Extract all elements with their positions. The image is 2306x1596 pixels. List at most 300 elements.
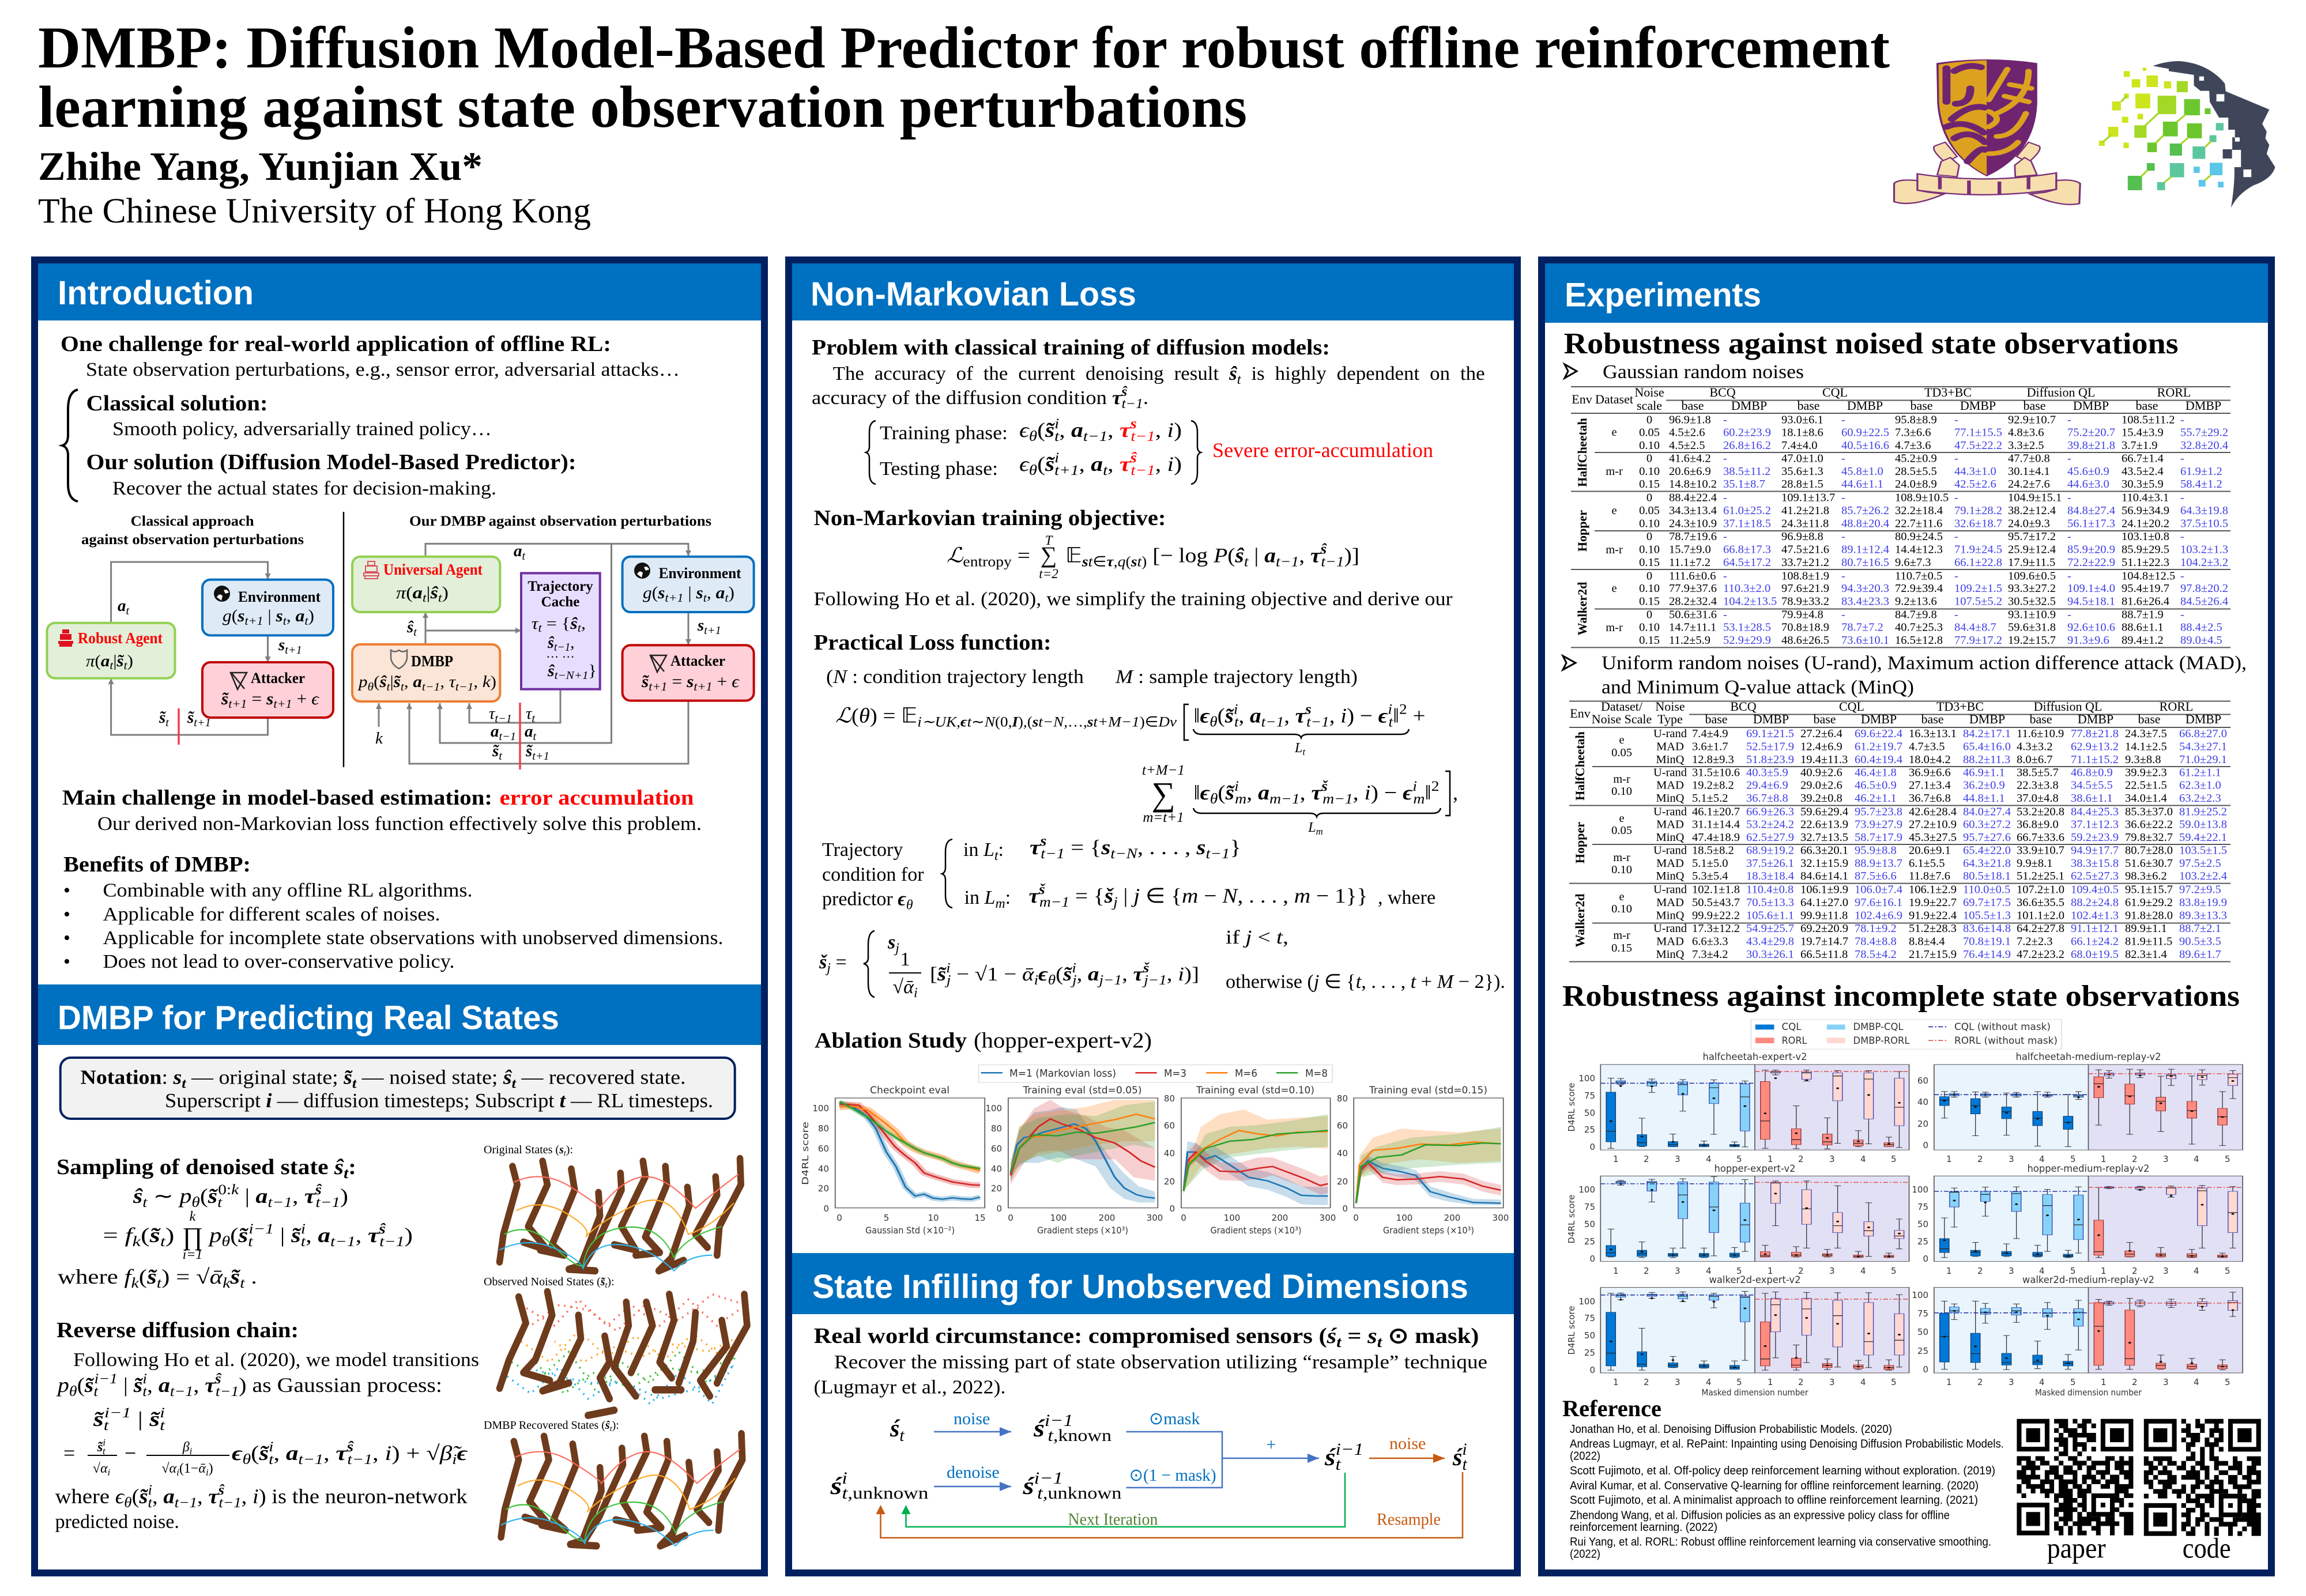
- text block: problem: [812, 335, 1485, 412]
- x tick labels: 4: [2039, 1154, 2045, 1164]
- text and formula: reverse diffusion: predicted noise.: [55, 1511, 179, 1533]
- table body: 18.3±18.4: [1746, 870, 1794, 882]
- table body: 78.5±4.2: [1855, 948, 1897, 961]
- table body: 32.1±15.9: [1800, 857, 1848, 870]
- table body: 7.4±4.0: [1781, 439, 1818, 452]
- reference list: Rui Yang, et al. RORL: Robust offline reinforcement learning via conservative smoothing.: [1570, 1536, 1991, 1549]
- x tick labels: 5: [1736, 1377, 1742, 1387]
- subplot titles: halfcheetah-medium-replay-v2: [2015, 1051, 2161, 1063]
- table body: 44.6±1.1: [1841, 478, 1883, 491]
- table body: 18.0±4.2: [1909, 753, 1951, 766]
- table body: 11.6±10.9: [2017, 727, 2064, 740]
- table body: 47.5±22.2: [1954, 439, 2002, 452]
- box: DMBP: [352, 644, 500, 701]
- logo: CUHK crest: [1894, 59, 2080, 205]
- x tick labels: 3: [1675, 1266, 1680, 1276]
- table body: 9.9±8.1: [2017, 857, 2053, 870]
- table body: 64.2±27.8: [2017, 922, 2064, 935]
- table body: 0: [1646, 530, 1652, 543]
- heading: ablation study: Ablation Study: [815, 1028, 967, 1052]
- y tick labels: 25: [1584, 1125, 1595, 1135]
- chart titles: Training eval (std=0.10): [1196, 1085, 1314, 1096]
- table body: 62.3±1.0: [2179, 779, 2221, 792]
- formula: s-check definition: šj =: [819, 952, 847, 976]
- table body: -: [1841, 452, 1845, 465]
- table body: 3.3±2.5: [2008, 439, 2044, 452]
- table body: 0.15: [1639, 634, 1660, 647]
- chart ticks: 300: [1320, 1213, 1336, 1223]
- x tick labels: [1613, 1154, 2230, 1387]
- chart ticks: 80: [1164, 1093, 1175, 1104]
- x tick labels: 4: [1860, 1154, 1866, 1164]
- table body: U-rand: [1653, 806, 1687, 818]
- nodes: śit: [1452, 1440, 1468, 1474]
- icon: robot: [364, 561, 379, 579]
- heading: against observation perturbations: [81, 532, 304, 548]
- diagram: DMBP against perturbations: [352, 514, 754, 769]
- subplot: hopper-medium-replay: [1934, 1176, 2243, 1262]
- table body: -: [2180, 491, 2184, 504]
- x tick labels: 4: [1860, 1266, 1866, 1276]
- table body: 36.7±8.8: [1746, 792, 1788, 805]
- text: trajectory condition: , where: [1378, 887, 1435, 908]
- table body: 65.4±16.0: [1963, 741, 2011, 753]
- table body: 88.9±13.7: [1855, 857, 1902, 870]
- subplot titles: halfcheetah-expert-v2: [1703, 1051, 1807, 1063]
- diagram: resampling flow: [830, 1409, 1468, 1538]
- table body: 83.4±23.3: [1841, 595, 1889, 608]
- table body: 95.7±23.8: [1855, 806, 1902, 818]
- table body: 103.5±1.5: [2179, 844, 2227, 857]
- table body: 80.7±28.0: [2125, 844, 2173, 857]
- table header: [1572, 385, 2221, 413]
- x tick labels: 4: [2039, 1266, 2045, 1276]
- table body: 34.0±1.4: [2125, 792, 2167, 805]
- chart titles: Checkpoint eval: [870, 1085, 949, 1096]
- table body: -: [2067, 414, 2071, 427]
- y tick labels: 100: [1912, 1184, 1928, 1195]
- caption: original states: Original States (st):: [484, 1144, 573, 1158]
- text block: circumstance: Real world circumstance: compromised sensors ( śt = st ⊙ mask): [814, 1324, 1479, 1350]
- chart ticks: 0: [1008, 1213, 1013, 1223]
- table body: 30.3±5.9: [2122, 478, 2164, 491]
- table body: 35.1±8.7: [1723, 478, 1765, 491]
- x tick labels: 1: [2101, 1377, 2107, 1387]
- table body: 0.10: [1639, 439, 1660, 452]
- table body: 91.3±9.6: [2067, 634, 2109, 647]
- flow labels: τt: [526, 704, 536, 725]
- table body: 40.3±5.9: [1746, 766, 1788, 779]
- chart ticks: 15: [974, 1213, 986, 1223]
- table body: 24.3±10.9: [1669, 517, 1717, 530]
- flow labels: k: [375, 729, 383, 748]
- table body: 59.2±23.9: [2071, 831, 2119, 844]
- table body: 53.2±24.2: [1746, 818, 1794, 831]
- y tick labels: 20: [1917, 1119, 1928, 1129]
- table body: 84.5±26.4: [2180, 595, 2228, 608]
- table header: DMBP: [1861, 712, 1897, 726]
- table body: -: [1954, 414, 1958, 427]
- authors: Zhihe Yang, Yunjian Xu*: [38, 145, 483, 189]
- table header: BCQ: [1730, 699, 1757, 714]
- table body: 22.3±3.8: [2017, 779, 2059, 792]
- table body: -: [2067, 491, 2071, 504]
- caption: observed noised states: Observed Noised States (s̃t):: [484, 1276, 615, 1290]
- table rules: [1569, 701, 2230, 961]
- table body: 69.7±17.5: [1963, 896, 2011, 909]
- subplot titles: hopper-expert-v2: [1715, 1163, 1795, 1175]
- table body: 88.4±2.5: [2180, 621, 2222, 634]
- table body: 3.6±1.7: [1692, 741, 1728, 753]
- table body: 50.5±43.7: [1692, 896, 1740, 909]
- table body: 76.4±14.9: [1963, 948, 2011, 961]
- x tick labels: 4: [2194, 1377, 2199, 1387]
- table row labels: m-r: [1606, 544, 1623, 556]
- table body: -: [1723, 569, 1727, 582]
- box: robust agent: Robust Agent: [78, 629, 163, 647]
- formula: sampling: = fk(s̃t): [103, 1224, 174, 1250]
- table body: 0.10: [1639, 517, 1660, 530]
- table body: MAD: [1656, 818, 1684, 831]
- table body: -: [2180, 530, 2184, 543]
- chart ticks: 40: [818, 1164, 829, 1174]
- table body: U-rand: [1653, 766, 1687, 779]
- box: robust agent: [47, 623, 175, 678]
- table body: 54.9±25.7: [1746, 922, 1794, 935]
- subplot: hopper-expert: [1600, 1176, 1909, 1262]
- table body: 103.2±2.4: [2179, 870, 2227, 882]
- table body: 0.10: [1639, 621, 1660, 634]
- formula: s-check definition: [s̃ij − √1 − ᾱiϵθ(s̃ij, aj−1, τšj−1, i)]: [930, 961, 1199, 988]
- chart ticks: 0: [1169, 1203, 1175, 1214]
- table body: MAD: [1656, 935, 1684, 948]
- table body: 110.0±0.5: [1963, 883, 2010, 896]
- reference list: (2022): [1570, 1548, 1600, 1561]
- y tick labels: 100: [1578, 1296, 1595, 1307]
- table header: base: [2029, 712, 2052, 726]
- x tick labels: 1: [1946, 1377, 1952, 1387]
- table body: 62.5±27.3: [2071, 870, 2119, 882]
- x tick labels: 3: [1829, 1377, 1835, 1387]
- table body: 53.1±28.5: [1723, 621, 1771, 634]
- formula: sampling: i=1: [183, 1247, 202, 1262]
- formula: s-check definition: otherwise (j ∈ {t, . . . , t + M − 2}).: [1226, 971, 1505, 993]
- text block: main challenge: Main challenge in model-based estimation:: [62, 786, 492, 810]
- heading: reference: Reference: [1562, 1395, 1661, 1421]
- table body: 81.9±25.2: [2179, 806, 2227, 818]
- x tick labels: 3: [2009, 1377, 2014, 1387]
- table body: 66.7±1.4: [2122, 452, 2164, 465]
- x tick labels: 3: [1829, 1266, 1835, 1276]
- table body: -: [2067, 569, 2071, 582]
- walker sequences: [500, 1159, 747, 1546]
- table body: 94.5±18.1: [2067, 595, 2115, 608]
- table body: 81.6±26.4: [2122, 595, 2169, 608]
- table body: 36.6±22.2: [2125, 818, 2173, 831]
- table body: 47.5±21.6: [1781, 543, 1829, 556]
- table header: DMBP: [2078, 712, 2113, 726]
- table body: MAD: [1656, 857, 1684, 870]
- text: trajectory condition: in Lt:: [963, 839, 1004, 863]
- table body: -: [1841, 569, 1845, 582]
- table row labels: 0.10: [1611, 785, 1632, 798]
- subplot: halfcheetah-medium-replay: [1934, 1065, 2243, 1150]
- table body: 91.9±22.4: [1909, 909, 1957, 922]
- subheading: attack types: [1563, 652, 2247, 698]
- formula: practical loss: t+M−1: [1142, 763, 1185, 778]
- table body: 60.4±19.4: [1855, 753, 1902, 766]
- table row labels: m-r: [1613, 929, 1630, 942]
- table body: 92.6±10.6: [2067, 621, 2115, 634]
- table body: 12.8±9.3: [1692, 753, 1734, 766]
- table body: -: [1841, 608, 1845, 621]
- table row labels: e: [1611, 426, 1617, 439]
- formula: s-check definition: √ᾱi: [892, 976, 918, 1001]
- table header: base: [1921, 712, 1944, 726]
- y tick labels: 0: [1923, 1254, 1928, 1264]
- table body: 89.0±4.5: [2180, 634, 2222, 647]
- arrows: [881, 1432, 1463, 1538]
- table body: 85.9±20.9: [2067, 543, 2115, 556]
- formula: training vs testing: Testing phase:: [880, 458, 998, 480]
- table body: 88.2±11.3: [1963, 753, 2010, 766]
- flow labels: [947, 1409, 1441, 1529]
- table body: 7.4±4.9: [1692, 727, 1728, 740]
- table body: 97.2±9.5: [2179, 883, 2221, 896]
- chart axis labels: Gaussian Std (×10⁻²): [865, 1225, 955, 1236]
- y tick labels: 0: [1589, 1254, 1595, 1264]
- table body: 7.2±2.3: [2017, 935, 2053, 948]
- section header: Non-Markovian Loss: Non-Markovian Loss: [811, 276, 1136, 313]
- table body: -: [1841, 530, 1845, 543]
- chart ticks: 60: [1337, 1120, 1348, 1131]
- chart legend labels: M=3: [1164, 1067, 1186, 1080]
- table header: DMBP: [1960, 398, 1996, 413]
- text block: benefits: •: [63, 880, 70, 901]
- table body: 109.1±13.7: [1781, 491, 1835, 504]
- table body: 78.7±7.2: [1841, 621, 1883, 634]
- icon: globe: [214, 586, 230, 602]
- chart ticks: 40: [991, 1164, 1002, 1174]
- x tick labels: 2: [2132, 1377, 2138, 1387]
- chart ticks: 60: [1164, 1120, 1175, 1131]
- x tick labels: 1: [1613, 1266, 1619, 1276]
- table body: 46.5±0.9: [1855, 779, 1897, 792]
- formula: s-check definition: if j < t,: [1226, 927, 1288, 948]
- table body: 18.5±8.2: [1692, 844, 1734, 857]
- table body: 95.9±8.8: [1855, 844, 1897, 857]
- table body: 63.2±2.3: [2179, 792, 2221, 805]
- table body: -: [2180, 452, 2184, 465]
- table body: 102.4±6.9: [1855, 909, 1902, 922]
- table body: 95.7±27.6: [1963, 831, 2011, 844]
- table body: 21.7±15.9: [1909, 948, 1957, 961]
- y tick labels: 25: [1917, 1236, 1928, 1247]
- y tick labels: 0: [1589, 1142, 1595, 1152]
- table body: 90.5±3.5: [2179, 935, 2221, 948]
- chart ticks: 60: [818, 1144, 829, 1154]
- y tick labels: 75: [1917, 1308, 1928, 1319]
- x tick labels: 1: [2101, 1154, 2107, 1164]
- table header: scale: [1637, 398, 1662, 413]
- text block: benefits: •: [63, 951, 70, 972]
- table body: 5.3±5.4: [1692, 870, 1728, 882]
- table body: 26.8±16.2: [1723, 439, 1771, 452]
- y tick labels: 40: [1917, 1097, 1928, 1107]
- x tick labels: 5: [2070, 1154, 2076, 1164]
- table body: 85.9±29.5: [2122, 543, 2169, 556]
- text block: benefits: Benefits of DMBP:: [63, 852, 251, 877]
- table body: 64.5±17.2: [1723, 556, 1771, 569]
- table body: 61.2±19.7: [1855, 741, 1902, 753]
- text and formula: reverse diffusion: s̃it: [97, 1437, 105, 1457]
- table body: 47.0±1.0: [1781, 452, 1823, 465]
- table body: MinQ: [1656, 831, 1685, 844]
- table body: 68.9±19.2: [1746, 844, 1794, 857]
- formula: entropy loss: ∑: [1041, 542, 1057, 568]
- table body: 104.2±3.2: [2180, 556, 2228, 569]
- table body: MinQ: [1656, 909, 1685, 922]
- nodes: śit,unknown: [830, 1469, 929, 1503]
- axis labels: Masked dimension number: [2035, 1387, 2142, 1398]
- table body: 109.1±4.0: [2067, 582, 2115, 595]
- chart ticks: 0: [1353, 1213, 1359, 1223]
- table body: 0.10: [1639, 465, 1660, 478]
- box: trajectory cache: … …: [546, 646, 575, 661]
- table body: 6.6±3.3: [1692, 935, 1728, 948]
- heading: incomplete observations: Robustness against incomplete state observations: [1562, 980, 2240, 1013]
- table body: 44.3±1.0: [1954, 465, 1996, 478]
- heading: ablation study: [815, 1028, 1152, 1052]
- table body: 60.9±22.5: [1841, 426, 1889, 439]
- table body: 31.1±14.4: [1692, 818, 1740, 831]
- chart axis labels: Gradient steps (×10³): [1037, 1225, 1128, 1236]
- table header: Noise Scale: [1592, 712, 1652, 726]
- table body: 37.1±12.3: [2071, 818, 2119, 831]
- table body: 111.6±0.6: [1669, 569, 1716, 582]
- text and formula: reverse diffusion: ϵθ(s̃it, at−1, τŝt−1, i) + √ β̃iϵ: [232, 1439, 468, 1467]
- table body: 61.9±1.2: [2180, 465, 2222, 478]
- table body: 66.7±33.6: [2017, 831, 2064, 844]
- chart ticks: 200: [1099, 1213, 1115, 1223]
- table body: -: [1723, 452, 1727, 465]
- table body: 108.9±10.5: [1895, 491, 1949, 504]
- table body: 66.1±24.2: [2071, 935, 2119, 948]
- table body: 72.9±39.4: [1895, 582, 1943, 595]
- formula: s-check definition: 1: [900, 949, 910, 970]
- y tick labels: 100: [1912, 1290, 1928, 1300]
- table body: 25.9±12.4: [2008, 543, 2056, 556]
- table body: 97.6±21.9: [1781, 582, 1829, 595]
- table body: 59.6±31.8: [2008, 621, 2056, 634]
- logo: pixel head: [2099, 61, 2275, 208]
- table body: 104.8±12.5: [2122, 569, 2175, 582]
- text: trajectory condition: τst−1 = {st−N, . . . , st−1}: [1030, 833, 1241, 862]
- flow labels: s̃t: [492, 742, 503, 763]
- table body: 24.0±8.9: [1895, 478, 1937, 491]
- table body: 41.2±21.8: [1781, 504, 1829, 517]
- nodes: śi−1t,unknown: [1022, 1469, 1122, 1503]
- x tick labels: 3: [2163, 1377, 2169, 1387]
- table body: 110.4±0.8: [1746, 883, 1793, 896]
- box: trajectory cache: ŝt−1,: [547, 634, 574, 654]
- table body: 108.5±11.2: [2122, 414, 2175, 427]
- nodes: śt: [890, 1416, 905, 1445]
- legend: [1751, 1020, 2062, 1049]
- box: environment: g(st+1 | st, at): [643, 583, 734, 605]
- text block: solutions: Recover the actual states for decision-making.: [112, 478, 496, 499]
- caption: code: code: [2183, 1532, 2231, 1564]
- formula: sampling: [58, 1182, 413, 1291]
- formula: practical loss: ℒ(θ) = 𝔼i∼UK,ϵt∼N(0,I),(st−N,…,st+M−1)∈Dν: [835, 704, 1177, 730]
- table body: U-rand: [1653, 844, 1687, 857]
- table body: 46.9±1.1: [1963, 766, 2005, 779]
- table body: 40.9±2.6: [1800, 766, 1842, 779]
- heading: practical loss: Practical Loss function:: [814, 631, 1052, 655]
- table body: 36.7±6.8: [1909, 792, 1951, 805]
- table body: 110.7±0.5: [1895, 569, 1942, 582]
- text block: solutions: [86, 391, 576, 499]
- table body: 95.7±17.2: [2008, 530, 2056, 543]
- formula: s-check definition: [819, 927, 1505, 1001]
- y tick labels: 50: [1584, 1330, 1595, 1341]
- box: environment: Environment: [659, 565, 741, 582]
- table body: 39.2±0.8: [1800, 792, 1842, 805]
- table body: 46.4±1.8: [1855, 766, 1897, 779]
- chart ticks: 80: [818, 1123, 829, 1134]
- table row labels: m-r: [1606, 465, 1623, 478]
- training eval 0.15: [1356, 1127, 1501, 1205]
- table body: 77.9±37.6: [1669, 582, 1717, 595]
- table row labels: [1575, 418, 1623, 635]
- reference list: Aviral Kumar, et al. Conservative Q-learning for offline reinforcement learning. (2020): [1570, 1480, 1979, 1492]
- y tick labels: 75: [1917, 1202, 1928, 1212]
- table header: Env: [1570, 706, 1591, 720]
- table body: 0.10: [1639, 582, 1660, 595]
- chart ticks: 300: [1493, 1213, 1509, 1223]
- axis labels: Masked dimension number: [1702, 1387, 1808, 1398]
- table row labels: Hopper: [1575, 510, 1589, 552]
- text: trajectory condition: τšm−1 = {šj | j ∈ {m − N, . . . , m − 1}}: [1028, 882, 1368, 910]
- box: attacker: s̃t+1 = st+1 + ϵ: [641, 672, 740, 693]
- x tick labels: 1: [1768, 1154, 1773, 1164]
- table body: 47.2±23.2: [2017, 948, 2064, 961]
- x tick labels: 5: [1891, 1154, 1897, 1164]
- table body: 83.6±14.8: [1963, 922, 2011, 935]
- table row labels: 0.10: [1611, 863, 1632, 876]
- table body: 78.7±19.6: [1669, 530, 1717, 543]
- table header: DMBP: [1753, 712, 1789, 726]
- table body: 43.5±2.4: [2122, 465, 2164, 478]
- chart ticks: 100: [1050, 1213, 1067, 1223]
- heading: noised observations: Robustness against noised state observations: [1564, 327, 2179, 360]
- chart legend labels: M=1 (Markovian loss): [1009, 1067, 1116, 1080]
- table body: 85.7±26.2: [1841, 504, 1889, 517]
- text block: main challenge: Our derived non-Markovian loss function effectively solve this problem.: [97, 813, 702, 835]
- table body: 33.9±10.7: [2017, 844, 2064, 857]
- table row labels: [1573, 731, 1632, 954]
- chart ticks: 40: [1337, 1148, 1348, 1159]
- chart ticks: 20: [1337, 1176, 1348, 1187]
- callout: severe error accumulation: Severe error-accumulation: [1212, 439, 1433, 462]
- table body: 31.5±10.6: [1692, 766, 1740, 779]
- table body: 104.2±13.5: [1723, 595, 1777, 608]
- table header: DMBP: [1847, 398, 1883, 413]
- y tick labels: 75: [1584, 1091, 1595, 1101]
- formula: sampling: pθ(s̃ti−1 | s̃it, at−1, τŝt−1): [207, 1221, 413, 1250]
- table body: 103.2±1.3: [2180, 543, 2228, 556]
- chart ticks: 200: [1444, 1213, 1460, 1223]
